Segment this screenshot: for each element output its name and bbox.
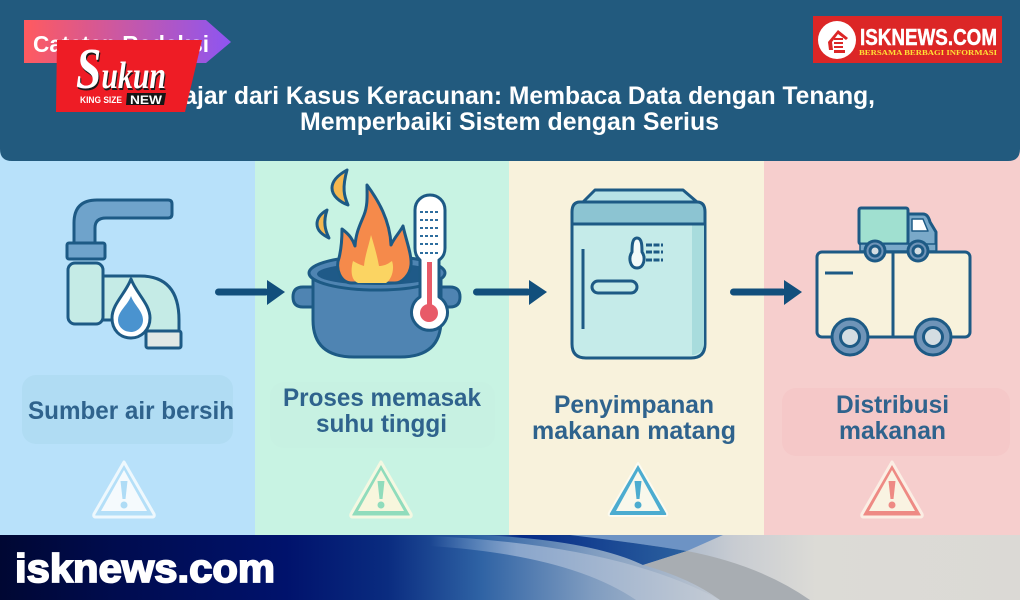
- panel: memasak background: [255, 150, 509, 536]
- icon: cooking pot with flame and thermometer: [293, 170, 460, 357]
- label: Distribusi makanan: makanan: [839, 417, 946, 445]
- icon: warning triangle red: [862, 462, 922, 517]
- footer banner: [0, 535, 1020, 600]
- icon: warning triangle teal: [609, 463, 667, 516]
- arrow: air ke memasak: [215, 280, 285, 305]
- label: Proses memasak suhu tinggi: Proses memasak: [283, 384, 481, 412]
- label: Sumber air bersih: Sumber air bersih: [28, 397, 234, 425]
- header band: [0, 0, 1020, 161]
- badge: Sukun King Size New: [56, 36, 202, 112]
- logo: ISKNEWS.COM: BERSAMA BERBAGI INFORMASI: [859, 48, 997, 57]
- title: [145, 82, 875, 136]
- label: Distribusi makanan: [782, 388, 1010, 456]
- panel: distribusi background: [764, 150, 1020, 536]
- label: Proses memasak suhu tinggi: [270, 382, 495, 448]
- title: Belajar dari Kasus Keracunan: Membaca Data dengan Tenang,: [145, 82, 875, 110]
- label: Proses memasak suhu tinggi: suhu tinggi: [316, 410, 447, 438]
- label: Distribusi makanan: Distribusi: [836, 391, 949, 419]
- label: Penyimpanan makanan matang: [532, 391, 736, 445]
- panel: sumber air background: [0, 150, 255, 536]
- label: Penyimpanan makanan matang: makanan matang: [532, 417, 736, 445]
- title: Memperbaiki Sistem dengan Serius: [300, 108, 719, 136]
- arrow: penyimpanan ke distribusi: [730, 280, 802, 305]
- icon: pipe and water drop: [67, 200, 181, 348]
- label: Penyimpanan makanan matang: Penyimpanan: [554, 391, 714, 419]
- tag: Catatan Redaksi: Catatan Redaksi: [33, 31, 209, 57]
- icon: warning triangle blue: [94, 462, 154, 517]
- logo: ISKNEWS.COM: [813, 16, 1002, 63]
- icon: delivery truck: [817, 208, 970, 355]
- footer wordmark: isknews.com: [15, 547, 275, 591]
- label: Sumber air bersih: [22, 375, 234, 444]
- arrow: memasak ke penyimpanan: [473, 280, 547, 305]
- panel: penyimpanan background: [509, 150, 764, 536]
- badge: Sukun King Size New: Sukun: [76, 36, 166, 101]
- badge: Sukun King Size New: Sukun: [77, 38, 167, 103]
- badge: Sukun King Size New: NEW: [130, 93, 163, 107]
- badge: Sukun King Size New: KING SIZE: [80, 95, 122, 105]
- tag: Catatan Redaksi: [24, 20, 231, 63]
- icon: refrigerator: [572, 190, 705, 358]
- icon: warning triangle green: [351, 462, 411, 517]
